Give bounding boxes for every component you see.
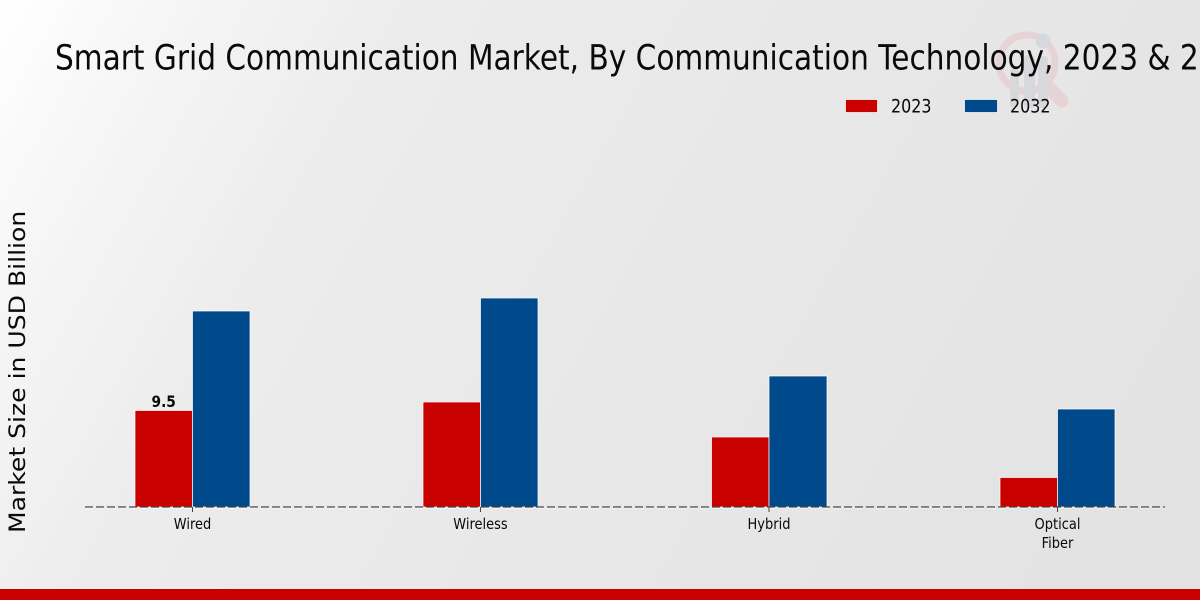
x axis baseline — [85, 507, 1165, 512]
x axis labels: Wired — [174, 516, 211, 533]
x axis labels: Fiber — [1042, 535, 1073, 552]
group: Optical Fiber — [1000, 409, 1115, 507]
y axis label: Market Size in USD Billion — [4, 211, 31, 533]
x axis labels: Wireless — [453, 516, 508, 533]
x axis labels: Hybrid — [748, 516, 790, 533]
legend — [846, 96, 1050, 118]
group: Wireless — [423, 298, 538, 507]
data label: 9.5 — [152, 392, 176, 411]
x axis labels — [174, 516, 1080, 552]
icon: watermark magnifier with bars — [999, 34, 1062, 108]
footer bar — [0, 589, 1200, 600]
legend item: 2032: 2032 — [1010, 96, 1050, 118]
group: Wired — [135, 311, 250, 507]
legend item: 2023 — [846, 96, 931, 118]
legend item: 2023: 2023 — [891, 96, 931, 118]
group: Hybrid — [712, 376, 827, 507]
legend item: 2032 — [964, 96, 1050, 118]
bar chart — [135, 298, 1115, 507]
x axis labels: Optical — [1035, 516, 1080, 533]
